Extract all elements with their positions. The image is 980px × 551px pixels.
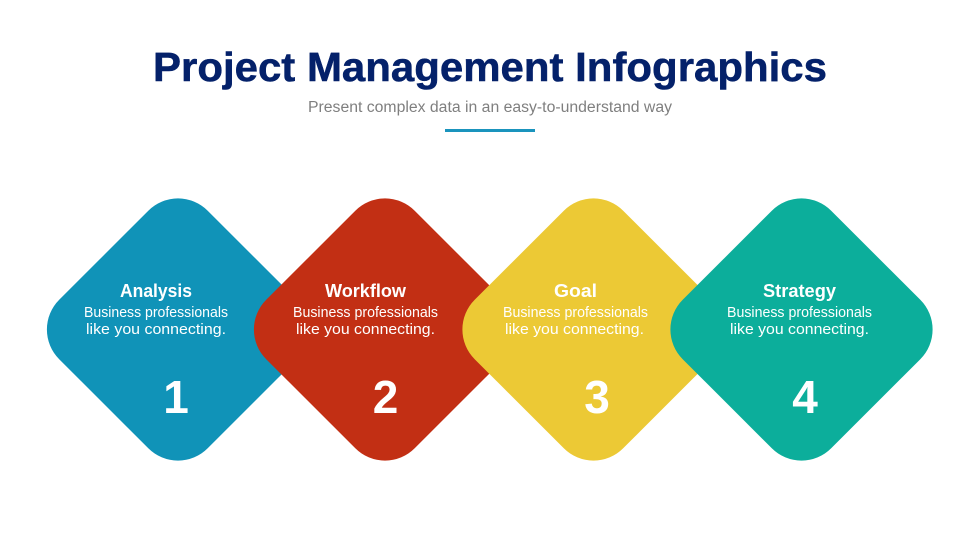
text: step 2 description: like you connecting. (296, 321, 435, 338)
title underline (445, 129, 535, 132)
text: step 1 description: Business professionals (84, 304, 228, 321)
number: 2: 2 (373, 371, 398, 423)
diamond: step 4 (653, 181, 950, 478)
diamond: step 3 (445, 181, 742, 478)
text: step 4 description: Business professionals (727, 304, 872, 321)
text: step 4 description (727, 304, 872, 338)
text: step 4 description: like you connecting. (730, 321, 869, 338)
subtitle: Present complex data in an easy-to-understand way (308, 99, 672, 116)
panel: step 1 Analysis (30, 181, 326, 478)
title: Project Management Infographics (153, 44, 827, 90)
number: 1: 1 (163, 371, 189, 423)
text: step 3 description (503, 304, 648, 338)
diamond: step 2 (237, 181, 533, 478)
number: 3: 3 (584, 371, 610, 423)
heading: Goal: Goal (554, 280, 597, 301)
text: step 1 description (84, 304, 228, 338)
heading: Strategy: Strategy (763, 280, 837, 301)
panel: step 2 Workflow (237, 181, 533, 478)
text: step 2 description (293, 304, 438, 338)
panel: step 4 Strategy (653, 181, 950, 478)
text: step 1 description: like you connecting. (86, 321, 226, 338)
text: step 2 description: Business professionals (293, 304, 438, 321)
number: 4: 4 (792, 371, 818, 423)
text: step 3 description: Business professionals (503, 304, 648, 321)
panel: step 3 Goal (445, 181, 742, 478)
diamond: step 1 (30, 181, 326, 478)
heading: Analysis: Analysis (120, 280, 192, 301)
text: step 3 description: like you connecting. (505, 321, 644, 338)
heading: Workflow: Workflow (325, 280, 407, 301)
